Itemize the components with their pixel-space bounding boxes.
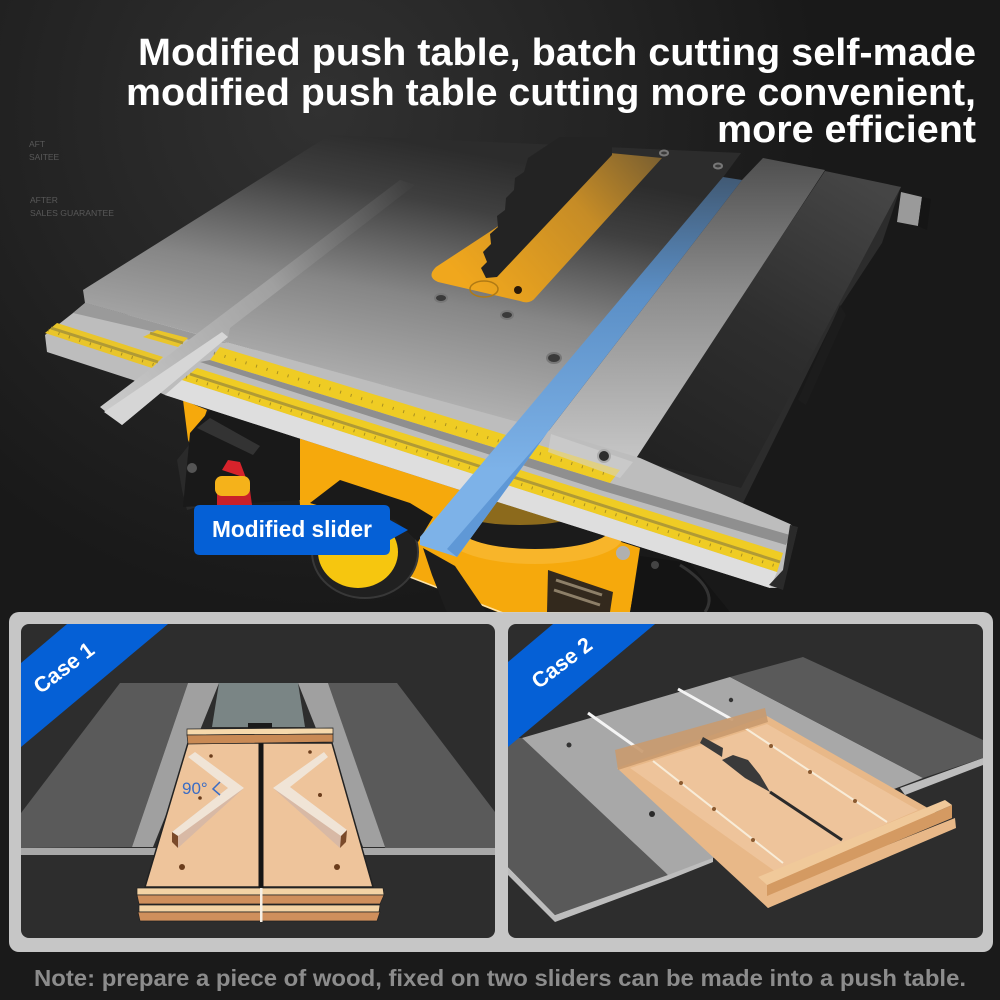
panel: case 1 — [21, 624, 495, 938]
blue modified slider — [420, 177, 742, 557]
clear acrylic cursor — [548, 434, 633, 478]
faint background caption — [29, 139, 114, 218]
black side extension — [634, 171, 901, 488]
faint background caption: AFTER — [30, 195, 58, 205]
case 2 rear fence — [615, 708, 768, 770]
panel: case 2 — [508, 624, 983, 938]
ruler rail body — [45, 303, 797, 588]
background glow — [0, 0, 1000, 610]
case 1 screw holes — [179, 750, 340, 870]
outer light panel — [9, 612, 993, 952]
faint background caption: AFT — [29, 139, 45, 149]
rail end cap — [769, 525, 798, 590]
white front rail strip — [165, 380, 777, 588]
rear rail end — [897, 192, 922, 226]
case 1 centre kerf — [258, 742, 264, 888]
case 2 front fence — [758, 800, 956, 908]
case 1 left angle guide — [172, 752, 244, 848]
case 1 dark background — [21, 624, 495, 938]
case 1 wooden board — [145, 743, 373, 887]
grey rail channel — [200, 360, 790, 545]
heading: Modified push table, batch cutting self-made — [138, 32, 976, 74]
heading — [126, 32, 976, 151]
table saw machine — [45, 135, 931, 613]
case 1 rear fence — [187, 728, 333, 744]
case 1 90 degree label: 90° — [182, 779, 208, 798]
yellow blade insert — [431, 153, 662, 302]
case 1 right angle guide — [273, 752, 347, 848]
case 1 label: Case 1 — [29, 638, 99, 698]
table screws — [435, 150, 722, 363]
faint background caption: SALES GUARANTEE — [30, 208, 114, 218]
machine side and feet — [616, 186, 901, 612]
front yellow ruler — [182, 368, 783, 572]
switch box and knob — [177, 410, 300, 510]
case 2 screw holes — [679, 744, 857, 842]
heading: more efficient — [717, 109, 976, 151]
yellow saw body — [183, 400, 640, 613]
case 1 table surface — [21, 683, 495, 855]
case 1 ribbon — [21, 624, 168, 747]
insert adjuster and hole — [470, 281, 522, 297]
heading: modified push table cutting more convenient, — [126, 72, 976, 114]
callout: modified slider — [194, 505, 408, 555]
note: Note: prepare a piece of wood, fixed on two sliders can be made into a push table. — [34, 965, 966, 991]
faint background caption: SAITEE — [29, 152, 60, 162]
saw blade — [481, 137, 612, 278]
case 2 saw blade — [700, 737, 842, 840]
grey right table panel — [547, 158, 825, 463]
grey rail step — [73, 303, 228, 343]
ruler tick marks — [48, 330, 779, 567]
ruler centre lines — [51, 328, 780, 562]
wheel and handle — [310, 480, 487, 613]
upper-left yellow ruler — [143, 330, 188, 347]
case 1 90 degree label — [182, 779, 220, 798]
callout: modified slider: Modified slider — [212, 516, 372, 542]
main table plate — [83, 135, 741, 428]
case 2 ribbon — [508, 624, 655, 747]
case 2 table surface — [508, 657, 983, 922]
far-left yellow ruler — [45, 323, 163, 368]
case 1 front fence — [137, 888, 384, 922]
grey cross slider — [100, 180, 415, 425]
back yellow ruler — [210, 347, 620, 483]
case 2 dark background — [508, 624, 983, 938]
case 2 wooden board — [617, 716, 940, 908]
rail end opening — [918, 197, 931, 230]
case 2 label: Case 2 — [527, 633, 597, 693]
